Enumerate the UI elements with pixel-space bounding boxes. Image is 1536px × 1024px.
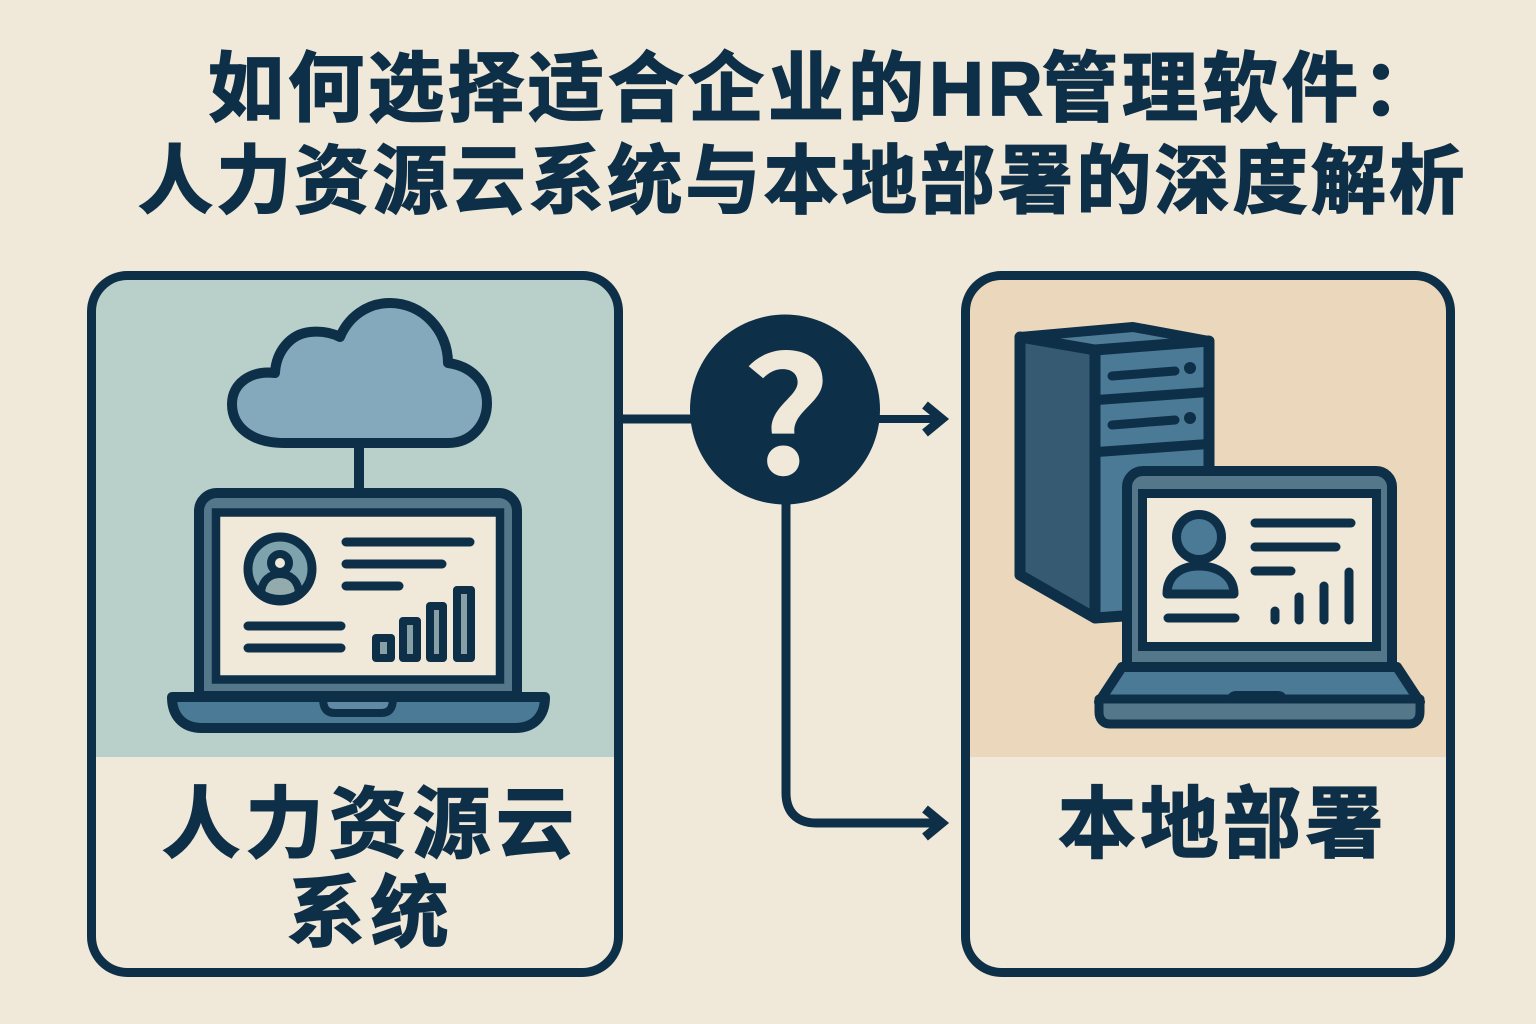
title: 管理软件： bbox=[1042, 47, 1442, 132]
label: on-premise: 本地部署 bbox=[1058, 780, 1388, 868]
bar chart bbox=[376, 590, 471, 658]
connector: cloud to laptop bbox=[354, 443, 364, 492]
icon: on-premise laptop bbox=[1099, 471, 1420, 724]
text lines bbox=[248, 542, 470, 648]
title: HR bbox=[929, 47, 1047, 132]
icon: user bbox=[1167, 514, 1234, 594]
arrow: question mark to on-premise illustration bbox=[875, 405, 942, 433]
icon: server tower bbox=[1020, 327, 1209, 618]
icon: user avatar bbox=[248, 537, 312, 601]
title: 如何选择适合企业的 bbox=[208, 47, 928, 132]
panel: on-premise deployment bbox=[966, 276, 1450, 972]
connector: cloud panel to question mark bbox=[620, 414, 695, 424]
label: cloud system bbox=[162, 780, 580, 957]
icon: cloud bbox=[232, 303, 487, 443]
bar chart bbox=[1275, 572, 1349, 620]
label: cloud system: 人力资源云 bbox=[162, 780, 580, 868]
panel: HR cloud system bbox=[92, 276, 618, 972]
icon: cloud laptop bbox=[172, 493, 545, 728]
icon: question mark circle: ? bbox=[741, 289, 831, 521]
label: cloud system: 系统 bbox=[287, 869, 454, 957]
title bbox=[138, 47, 1467, 223]
text lines bbox=[1168, 523, 1351, 618]
title: 人力资源云系统与本地部署的深度解析 bbox=[138, 139, 1467, 223]
icon: question mark circle bbox=[690, 289, 880, 521]
arrow: question mark to on-premise label bbox=[786, 500, 942, 837]
